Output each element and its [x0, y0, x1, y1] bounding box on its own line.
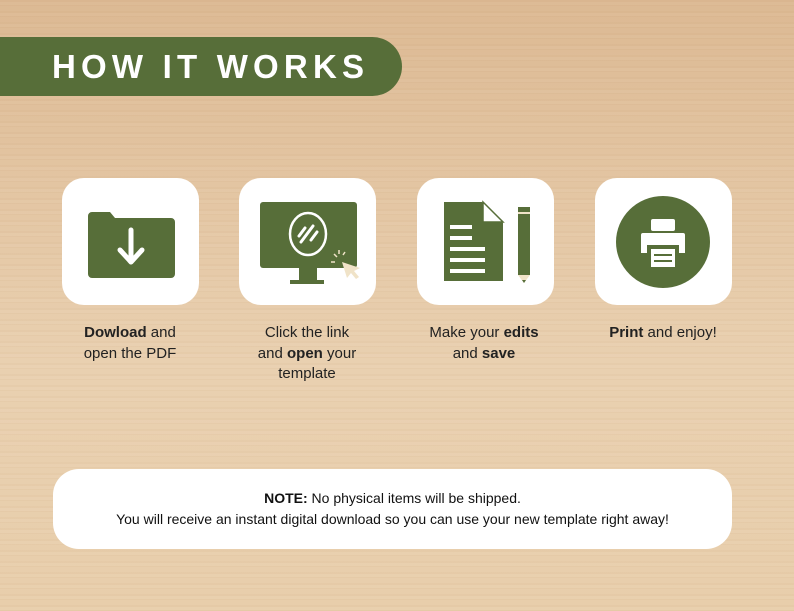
caption 3: and save — [453, 344, 515, 362]
caption 3 — [429, 324, 539, 362]
note box: You will receive an instant digital download so you can use your new template right away! — [116, 511, 669, 527]
caption 1 — [84, 324, 176, 362]
caption 1: Dowload and — [84, 324, 176, 341]
card: download folder icon — [62, 178, 199, 305]
caption 1: open the PDF — [84, 344, 176, 362]
note box: NOTE: No physical items will be shipped. — [264, 490, 521, 506]
card: printer icon — [595, 178, 732, 305]
caption 2: Click the link — [265, 324, 349, 341]
caption 3: Make your edits — [429, 324, 539, 341]
title banner — [0, 37, 402, 96]
caption 4: Print and enjoy! — [609, 324, 717, 341]
card: document and pencil icon — [417, 178, 554, 305]
caption 2 — [258, 324, 356, 382]
caption 2: template — [278, 365, 336, 382]
title banner: HOW IT WORKS — [52, 48, 369, 85]
card: monitor link icon — [239, 178, 376, 305]
caption 2: and open your — [258, 344, 356, 362]
note box — [53, 469, 732, 549]
